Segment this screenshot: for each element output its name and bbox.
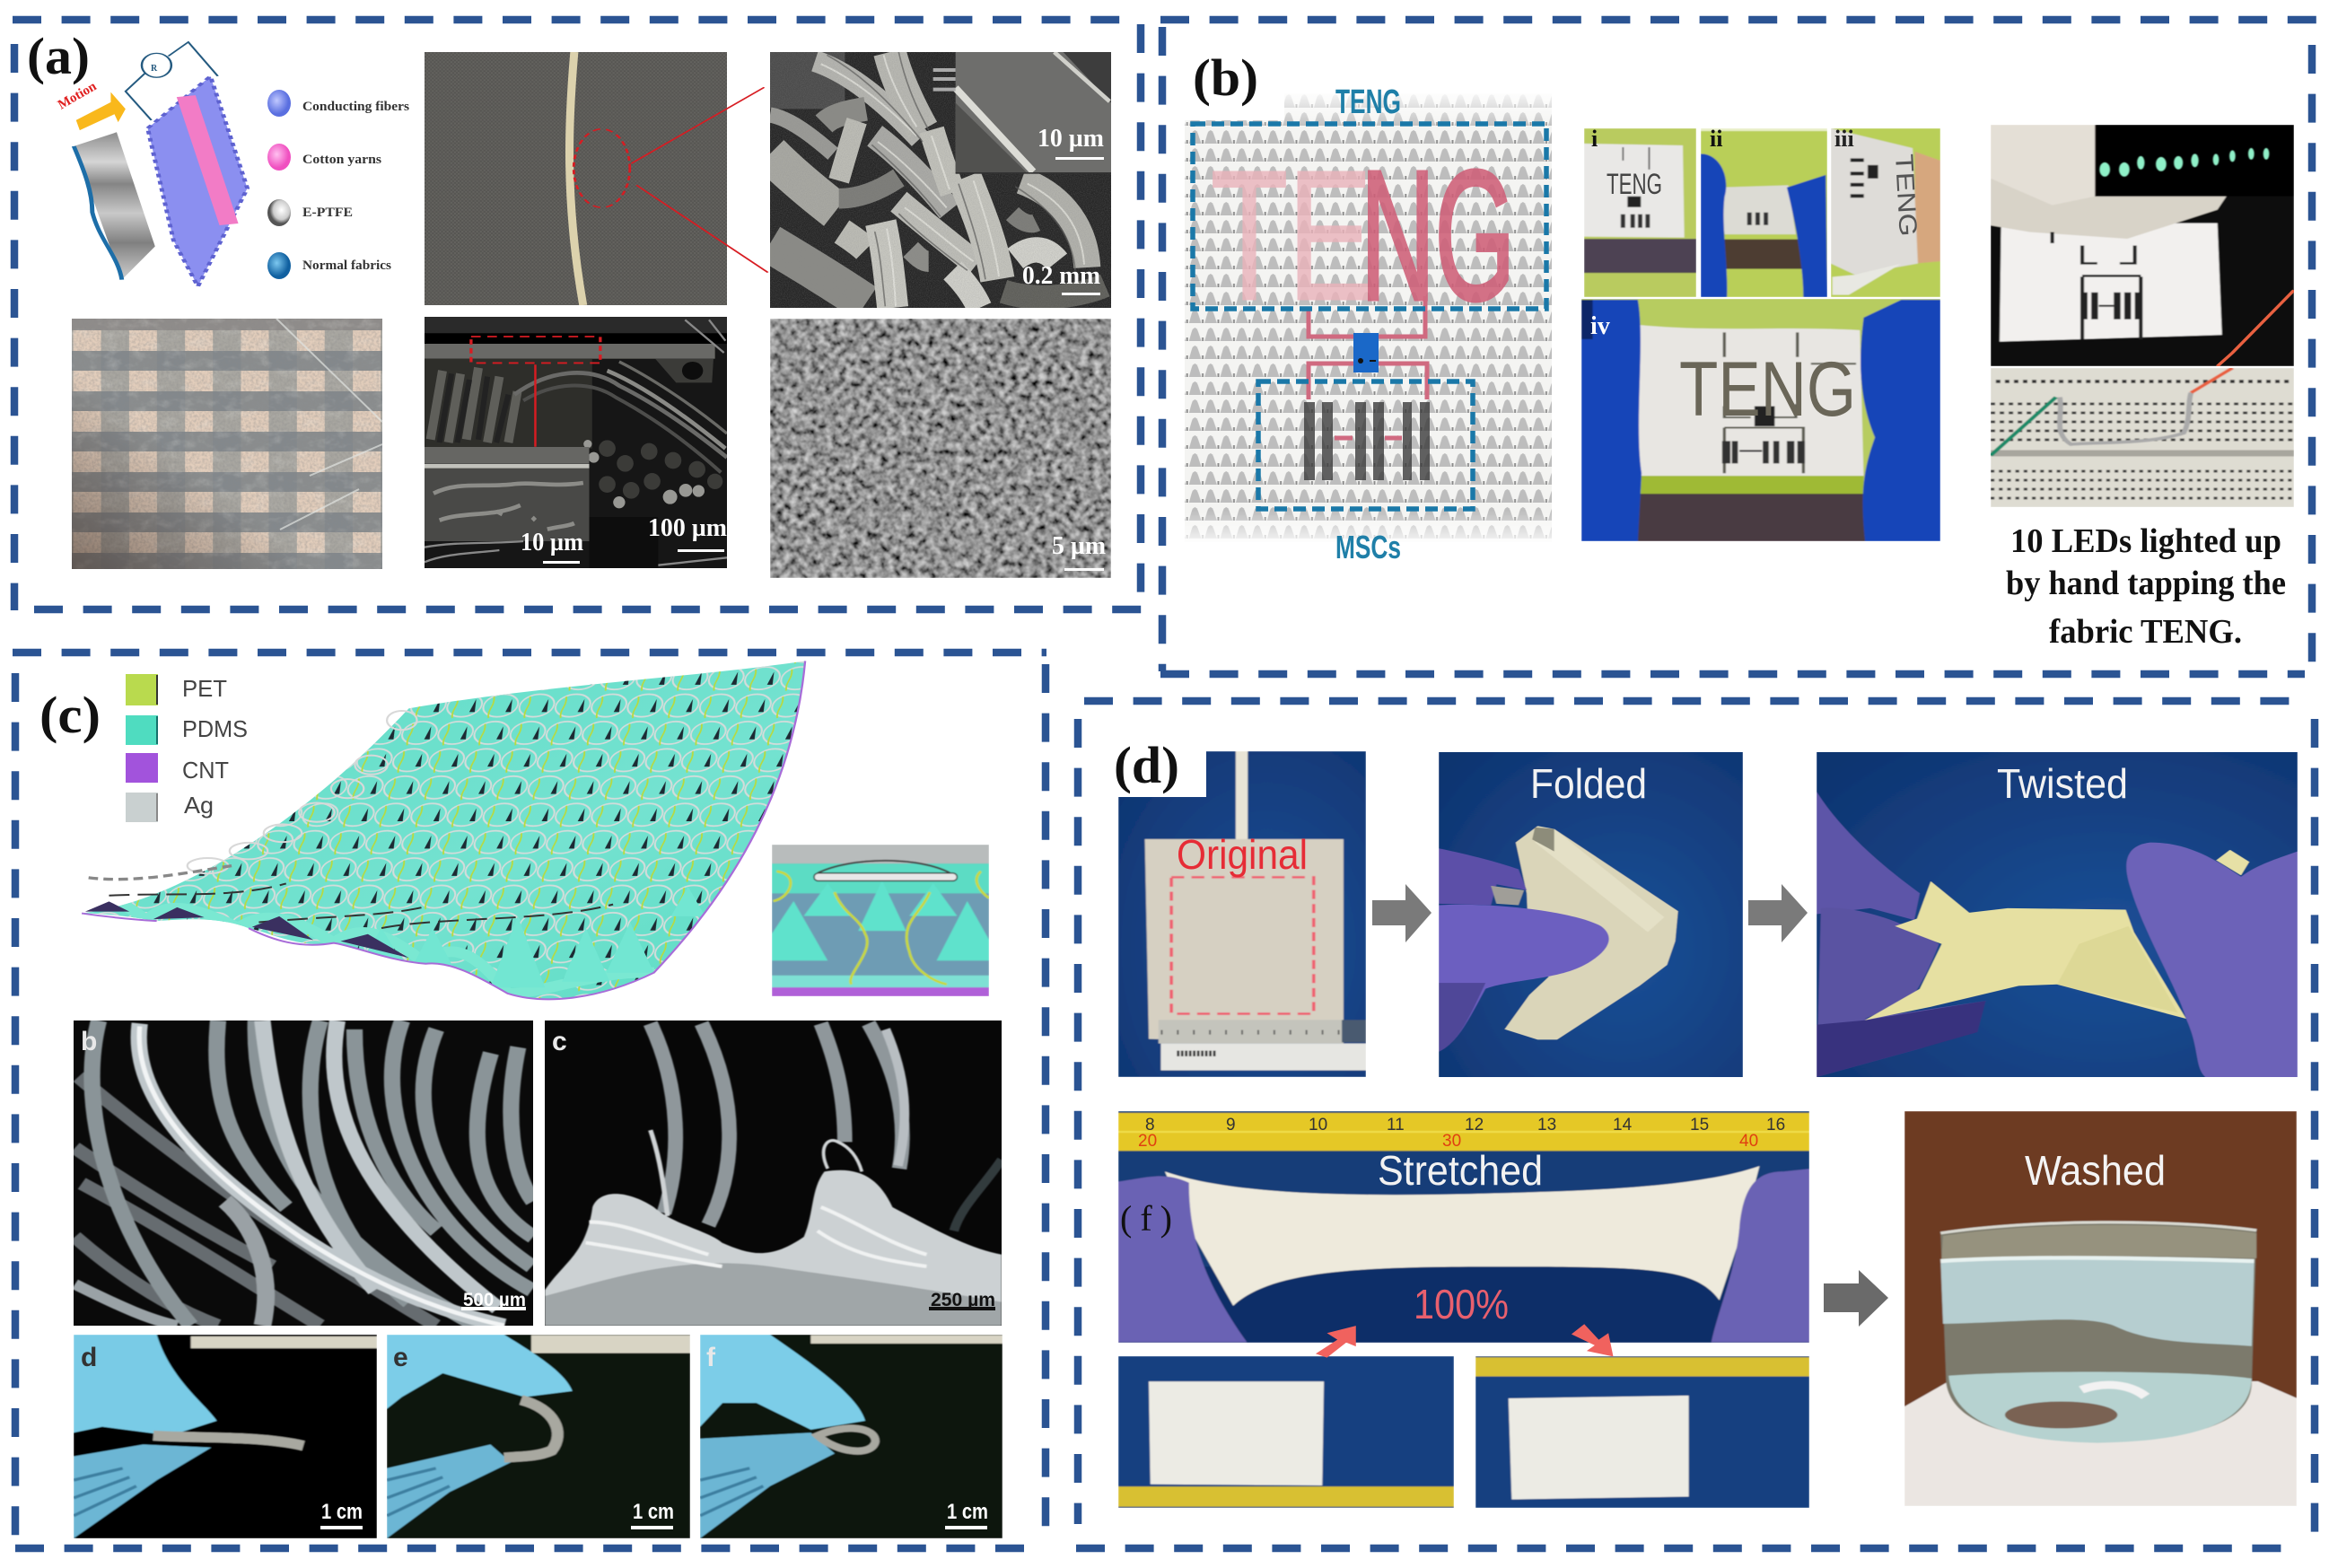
label: MSCs: MSCs <box>1335 529 1401 565</box>
legend: Normal fabrics <box>302 258 391 273</box>
ruler numbers: 11 <box>1387 1116 1405 1134</box>
photo: Washed <box>1904 1111 2297 1506</box>
ruler numbers: 15 <box>1690 1116 1709 1134</box>
heading: (b): (b) <box>1193 48 1258 107</box>
photo: Folded <box>1439 752 1743 1077</box>
ruler numbers: 12 <box>1465 1116 1484 1134</box>
MSC electrodes <box>1304 402 1430 480</box>
photo: Twisted: Twisted <box>1997 760 2128 807</box>
ruler numbers: 13 <box>1537 1116 1556 1134</box>
arrow <box>1824 1270 1888 1327</box>
ruler numbers: 8 <box>1145 1116 1155 1134</box>
photo: strip straight d: 1 cm <box>321 1500 363 1524</box>
scale labels: 100 µm <box>648 514 727 542</box>
pink arrows <box>1316 1324 1613 1358</box>
legend: PDMS <box>182 715 248 742</box>
photo: LED demo top <box>1991 125 2294 366</box>
legend: Ag <box>184 792 214 819</box>
photo: SEM fibres b <box>74 1021 533 1326</box>
photo i <box>1584 126 1696 297</box>
photo: SEM fibres b: b <box>81 1027 97 1056</box>
photo: Washed: Washed <box>2025 1147 2166 1194</box>
panel: a: R <box>151 64 158 74</box>
legend: Conducting fibers <box>302 100 409 114</box>
caption: LED text: 10 LEDs lighted up <box>2010 522 2281 560</box>
photo iii <box>1831 126 1940 297</box>
panel: a <box>13 20 1145 610</box>
photo iv <box>1581 299 1940 541</box>
photo ii: ii <box>1710 126 1722 152</box>
panel: c <box>13 653 1046 1548</box>
photo: strip looped f <box>700 1335 1003 1538</box>
arrow <box>1748 884 1808 942</box>
legend <box>267 90 409 279</box>
photo iii: TENG <box>1890 153 1922 237</box>
scale labels <box>521 125 1106 571</box>
ruler numbers: 14 <box>1613 1116 1633 1134</box>
label: TENG: TENG <box>1335 83 1401 121</box>
legend <box>126 674 248 822</box>
ruler numbers: 40 <box>1739 1132 1758 1151</box>
legend: PET <box>182 675 227 702</box>
ruler numbers: 30 <box>1442 1132 1461 1151</box>
ruler numbers: 10 <box>1309 1116 1327 1134</box>
photo: breadboard <box>1991 368 2294 507</box>
diagram: knitted TENG and MSCs: NG <box>1361 133 1515 338</box>
photo: Stretched: ( f ) <box>1120 1198 1172 1239</box>
legend: E-PTFE <box>302 206 353 220</box>
photo: relaxed fabric left <box>1118 1356 1454 1508</box>
scale labels: 10 µm <box>1038 125 1104 153</box>
photo: SEM fibres b: 500 µm <box>463 1290 526 1310</box>
photo: Twisted <box>1817 752 2298 1077</box>
scale labels: 10 µm <box>521 529 583 556</box>
photo i: i <box>1591 126 1598 152</box>
ruler numbers: 20 <box>1138 1132 1157 1151</box>
scale labels: 0.2 mm <box>1022 262 1100 290</box>
arrow <box>1372 884 1432 942</box>
photo: strip straight d <box>74 1335 377 1538</box>
photo ii <box>1701 126 1827 297</box>
diagram: cross-section inset <box>772 845 989 996</box>
photo: plaid fabric <box>72 319 382 569</box>
heading: (c): (c) <box>39 686 101 744</box>
caption: LED text: fabric TENG. <box>2049 613 2242 651</box>
heading: (d) with white box <box>1114 736 1206 797</box>
panel: d <box>1076 701 2315 1552</box>
heading: (a): (a) <box>27 27 90 85</box>
photo: strip straight d: d <box>81 1343 97 1372</box>
photo: SEM porous surface <box>770 319 1111 578</box>
big TENG letters: TE <box>1211 133 1372 338</box>
photo i: TENG <box>1607 168 1662 200</box>
annotations in red <box>471 87 768 447</box>
caption: LED text: by hand tapping the <box>2006 565 2286 602</box>
photo: strip looped f: f <box>706 1343 716 1372</box>
photo: SEM cross-section <box>425 317 727 568</box>
photo: strip bent e: e <box>393 1343 408 1372</box>
photo: SEM mounds c <box>545 1021 1002 1326</box>
diagram: knitted TENG and MSCs <box>1179 93 1552 542</box>
panel: b <box>1160 20 2317 674</box>
photo: Original <box>1118 751 1366 1077</box>
diagram: PDMS sheet with loops <box>68 655 818 1012</box>
photo iii: iii <box>1834 126 1854 152</box>
photo: SEM mounds c: 250 µm <box>931 1290 995 1310</box>
photo: Folded: Folded <box>1530 760 1647 807</box>
photo: Stretched: Stretched <box>1378 1147 1543 1194</box>
photo: Stretched: 100% <box>1414 1281 1509 1327</box>
photo: Original: Original <box>1177 831 1308 878</box>
ruler numbers: 9 <box>1226 1116 1236 1134</box>
photo: relaxed fabric right <box>1475 1356 1809 1508</box>
caption: LED text <box>2006 522 2286 651</box>
photo: strip bent e <box>387 1335 690 1538</box>
photo: SEM mounds c: c <box>552 1027 567 1056</box>
photo: SEM knitted fibres <box>770 52 1111 308</box>
schematic: fabric TENG <box>74 42 248 286</box>
photo iv: TENG <box>1679 346 1856 433</box>
legend: Cotton yarns <box>302 153 381 167</box>
photo: dark fabric with yarn <box>425 52 727 305</box>
photo: strip bent e: 1 cm <box>633 1500 674 1524</box>
ruler numbers: 16 <box>1766 1116 1785 1134</box>
scale labels: 5 µm <box>1052 532 1106 560</box>
legend: CNT <box>182 757 229 784</box>
heading: (d) with white box: (d) <box>1114 736 1179 794</box>
photo: Stretched <box>1118 1111 1809 1343</box>
label: Motion: Motion <box>56 79 100 112</box>
photo: strip looped f: 1 cm <box>947 1500 988 1524</box>
photo iv: iv <box>1590 312 1610 340</box>
ruler numbers <box>1138 1116 1785 1151</box>
